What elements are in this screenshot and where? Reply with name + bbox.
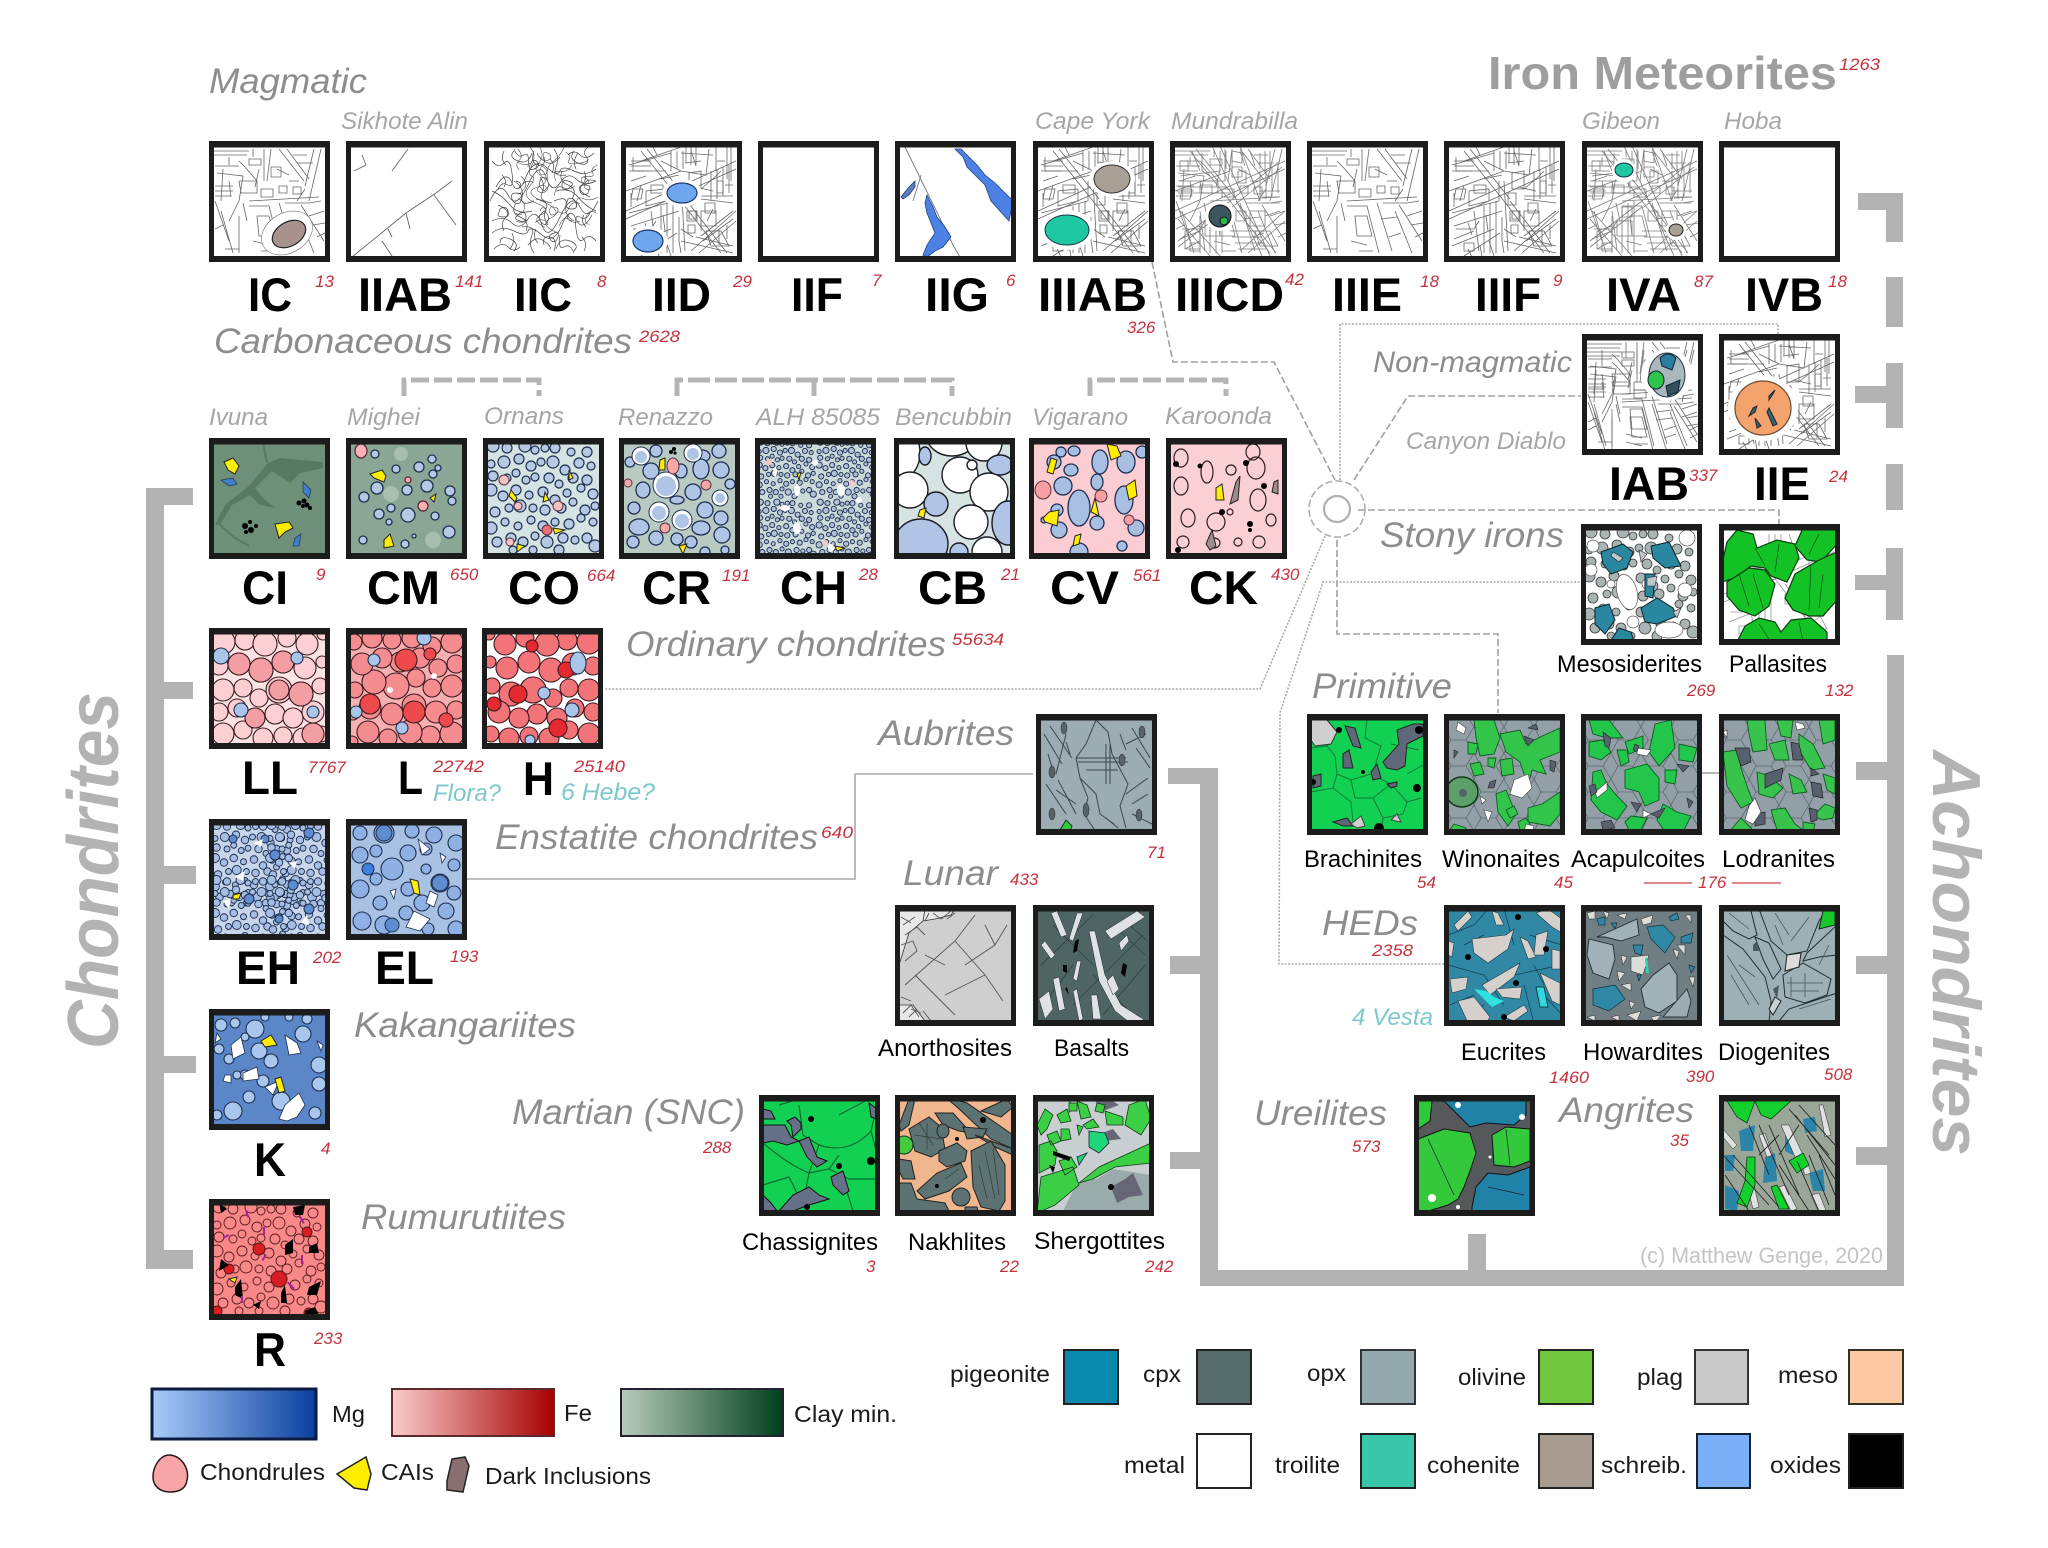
label: CO: CO (508, 561, 580, 614)
count: Pallasites: 132 (1825, 681, 1854, 700)
label: CB: CB (918, 561, 987, 614)
type name: Mighei: Mighei (347, 404, 421, 431)
legend: Mg gradient (152, 1389, 316, 1439)
mineral legend: troilite: troilite (1275, 1452, 1340, 1478)
panel: IIIF (1444, 141, 1565, 262)
panel: Ureilites (1414, 1095, 1535, 1216)
heading: Rumurutiites: Rumurutiites (361, 1198, 566, 1237)
heading: Stony irons: Stony irons (1380, 516, 1564, 555)
label: IIE: IIE (1754, 457, 1810, 510)
heading: Magmatic: Magmatic (209, 62, 368, 101)
count: IVB: 18 (1828, 272, 1847, 291)
panel: CH (755, 438, 876, 559)
count: HEDs: 2358 (1371, 941, 1414, 960)
type name: Cape York: Cape York (1035, 108, 1152, 135)
count: Martian: 288 (702, 1138, 732, 1157)
label: Basalts: Basalts (1054, 1035, 1129, 1062)
connector lines between groups (466, 262, 1781, 964)
mineral legend: oxides: oxides (1770, 1452, 1841, 1478)
count: carbonaceous: 2628 (638, 327, 681, 346)
type name: Hoba: Hoba (1724, 108, 1782, 135)
legend: clay gradient (621, 1389, 783, 1436)
count: CM: 650 (450, 565, 479, 584)
type name: Ivuna: Ivuna (209, 404, 268, 431)
panel: IIG (895, 141, 1016, 262)
label: IC: IC (248, 268, 292, 321)
label: IIG: IIG (925, 268, 989, 321)
count: Angrites: 35 (1670, 1131, 1689, 1150)
mineral legend: oxides (1770, 1434, 1903, 1488)
small dashed brackets: carbonaceous clans (404, 380, 1226, 396)
count: IIIF: 9 (1553, 271, 1563, 290)
label: IIAB: IIAB (358, 268, 452, 321)
panel: K (209, 1009, 330, 1130)
panel: H (482, 628, 603, 749)
label: Nakhlites: Nakhlites (908, 1229, 1006, 1256)
mineral legend: pigeonite (950, 1350, 1118, 1404)
label: IIICD: IIICD (1175, 268, 1284, 321)
count: EH: 202 (312, 948, 342, 967)
type name: Vigarano: Vigarano (1032, 404, 1128, 431)
count: K: 4 (321, 1139, 330, 1158)
legend label: Mg: Mg (332, 1401, 365, 1427)
mineral legend: cohenite (1427, 1434, 1593, 1488)
title: Iron Meteorites: Iron Meteorites (1488, 47, 1837, 99)
mineral legend: metal: metal (1124, 1452, 1185, 1478)
mineral legend: opx: opx (1307, 1360, 1347, 1386)
mineral legend: cpx (1143, 1350, 1251, 1404)
parent body: Flora: Flora? (433, 780, 502, 807)
type name: Canyon Diablo: Canyon Diablo (1406, 428, 1566, 455)
count: Brachinites: 54 (1417, 873, 1436, 892)
mineral legend: pigeonite: pigeonite (950, 1361, 1050, 1387)
count: Howardites: 390 (1686, 1067, 1715, 1086)
mineral legend: schreibersite: schreib. (1601, 1452, 1687, 1478)
label: Chassignites: Chassignites (742, 1229, 878, 1256)
count: Diogenites: 508 (1824, 1065, 1853, 1084)
legend: Fe gradient (392, 1389, 554, 1436)
count: L: 22742 (432, 757, 485, 776)
panel: Mesosiderites (1581, 524, 1702, 645)
label: IIC: IIC (514, 268, 572, 321)
label: Lodranites: Lodranites (1722, 846, 1835, 873)
count: enstatite: 640 (821, 823, 854, 842)
mineral legend: cohenite: cohenite (1427, 1452, 1520, 1478)
panel: Acapulcoites (1581, 714, 1702, 835)
panel: IIICD (1170, 141, 1291, 262)
heading: Kakangariites: Kakangariites (354, 1006, 576, 1045)
legend label: Dark Inclusions: Dark Inclusions (485, 1463, 651, 1489)
panel: Pallasites (1719, 524, 1840, 645)
panel: EH (209, 819, 330, 940)
count: CK: 430 (1271, 565, 1300, 584)
label: IIIF: IIIF (1475, 268, 1541, 321)
count: EL: 193 (450, 947, 479, 966)
mineral legend: troilite (1275, 1434, 1415, 1488)
heading: Martian (SNC): Martian (SNC) (512, 1093, 745, 1132)
panel: CK (1166, 438, 1287, 559)
heading: Aubrites: Aubrites (876, 714, 1014, 753)
heading: Carbonaceous chondrites: Carbonaceous chondrites (214, 322, 632, 361)
panel: CB (894, 438, 1015, 559)
mineral legend: plag (1637, 1350, 1748, 1404)
copyright note: (c) Matthew Genge, 2020 (1640, 1243, 1883, 1268)
panel: Lodranites (1719, 714, 1840, 835)
panel: EL (346, 819, 467, 940)
count: IIF: 7 (872, 271, 882, 290)
label: IID: IID (652, 268, 711, 321)
type name: ALH 85085: ALH 85085 (754, 404, 881, 431)
panel: IIAB (346, 141, 467, 262)
panel: L (346, 628, 467, 749)
count: Shergottites: 242 (1144, 1257, 1174, 1276)
panel: IC (209, 141, 330, 264)
count: IIICD: 42 (1285, 270, 1304, 289)
count: IAB: 337 (1689, 466, 1718, 485)
count: IIE: 24 (1828, 467, 1848, 486)
count: IVA: 87 (1694, 272, 1713, 291)
heading: Non-magmatic: Non-magmatic (1373, 346, 1572, 379)
mineral legend: olivine: olivine (1458, 1364, 1526, 1390)
label: EH: EH (236, 941, 300, 994)
count: Lunar: 433 (1010, 870, 1039, 889)
mineral legend: meso: meso (1778, 1362, 1838, 1388)
label: CH: CH (780, 561, 847, 614)
panel: CO (483, 438, 604, 559)
panel: Nakhlites (895, 1095, 1016, 1216)
heading: Ordinary chondrites: Ordinary chondrites (626, 625, 946, 664)
label: IVB: IVB (1745, 268, 1823, 321)
panel: Brachinites (1307, 714, 1428, 835)
mineral legend: meso (1778, 1350, 1903, 1404)
count: IID: 29 (732, 272, 752, 291)
heading: Ureilites: Ureilites (1254, 1094, 1387, 1133)
panel: Angrites (1719, 1095, 1840, 1216)
legend label: Chondrules: Chondrules (200, 1459, 325, 1485)
count: IIAB: 141 (455, 272, 483, 291)
panel: R (209, 1199, 330, 1320)
count: IIIE: 18 (1420, 272, 1439, 291)
count: CO: 664 (587, 566, 615, 585)
count: Ureilites: 573 (1352, 1137, 1381, 1156)
count: Aubrites: 71 (1147, 843, 1166, 862)
panel: CV (1029, 438, 1150, 561)
label: CK: CK (1189, 561, 1258, 614)
panel: CR (619, 438, 740, 559)
heading: Primitive: Primitive (1312, 667, 1452, 706)
legend label: Fe: Fe (564, 1400, 592, 1426)
rotated title: Achondrites: Achondrites (1918, 748, 1994, 1156)
count: acapulcoites and lodranites: 176 (1698, 873, 1727, 892)
label: CI: CI (242, 561, 288, 614)
count: CH: 28 (858, 565, 878, 584)
count: CI: 9 (316, 565, 326, 584)
panel: LL (209, 628, 330, 749)
count: Chassignites: 3 (866, 1257, 876, 1276)
panel: Chassignites (759, 1095, 880, 1216)
panel: IIC (484, 141, 605, 262)
type name: Bencubbin: Bencubbin (895, 404, 1012, 431)
count: R: 233 (313, 1329, 343, 1348)
panel: IID (621, 141, 742, 262)
type name: Karoonda: Karoonda (1165, 403, 1272, 430)
label: Pallasites: Pallasites (1729, 651, 1827, 678)
panel: IIIAB (1033, 141, 1154, 262)
panel: IIE (1719, 334, 1840, 455)
count: IIIAB: 326 (1127, 318, 1156, 337)
type name: Mundrabilla: Mundrabilla (1171, 108, 1298, 135)
label: LL: LL (242, 751, 298, 804)
label: IIIAB: IIIAB (1038, 268, 1147, 321)
panel: Basalts (1033, 905, 1154, 1026)
panel: IAB (1582, 334, 1703, 455)
label: IIF: IIF (791, 268, 843, 321)
label: H: H (523, 752, 554, 805)
label: Diogenites: Diogenites (1718, 1039, 1830, 1066)
mineral legend: plag: plag (1637, 1364, 1683, 1390)
label: Howardites: Howardites (1583, 1039, 1703, 1066)
mineral legend: cpx: cpx (1143, 1361, 1182, 1387)
heading: HEDs: HEDs (1322, 904, 1418, 943)
label: R: R (254, 1323, 286, 1376)
panel: IIIE (1307, 141, 1428, 262)
label: Acapulcoites: Acapulcoites (1571, 846, 1705, 873)
panel: Shergottites (1033, 1095, 1154, 1216)
type name: Ornans: Ornans (484, 403, 564, 430)
heading: Lunar: Lunar (903, 854, 999, 893)
heading: Angrites: Angrites (1557, 1091, 1694, 1130)
parent body: 6 Hebe: 6 Hebe? (561, 779, 656, 806)
label: CM: CM (367, 561, 440, 614)
count: Mesosiderites: 269 (1686, 681, 1716, 700)
label: IVA: IVA (1606, 268, 1681, 321)
panel: CM (346, 438, 467, 559)
count: Winonaites: 45 (1554, 873, 1573, 892)
label: CR: CR (642, 561, 711, 614)
label: Anorthosites: Anorthosites (878, 1035, 1012, 1062)
panel: Eucrites (1444, 905, 1565, 1026)
label: Brachinites: Brachinites (1304, 846, 1422, 873)
count: CV: 561 (1133, 566, 1161, 585)
label: Shergottites: Shergottites (1034, 1228, 1165, 1255)
panel: Howardites (1581, 905, 1702, 1026)
mineral legend: opx (1307, 1350, 1415, 1404)
panel: Diogenites (1719, 905, 1840, 1026)
legend label: CAIs: CAIs (381, 1459, 434, 1485)
parent body: 4 Vesta: 4 Vesta (1352, 1004, 1433, 1031)
heading: Enstatite chondrites: Enstatite chondrites (495, 818, 818, 857)
mineral legend: olivine (1458, 1350, 1593, 1404)
panel: IIF (758, 141, 879, 262)
panel: Aubrites (1036, 714, 1157, 835)
panel: CI (209, 438, 330, 559)
count: IIG: 6 (1006, 271, 1016, 290)
legend icon: chondrule (153, 1455, 188, 1492)
count: H: 25140 (573, 757, 626, 776)
count: LL: 7767 (308, 758, 346, 777)
label: L: L (398, 751, 423, 804)
type name: Sikhote Alin: Sikhote Alin (341, 108, 468, 135)
legend icon: CAI (337, 1457, 371, 1490)
panel: Winonaites (1444, 714, 1565, 835)
panel: IVB (1719, 141, 1840, 262)
type name: Gibeon: Gibeon (1582, 108, 1660, 135)
label: Mesosiderites: Mesosiderites (1557, 651, 1702, 678)
bracket: iron meteorites (1855, 193, 1903, 620)
label: CV: CV (1050, 561, 1120, 614)
mineral legend: schreibersite (1601, 1434, 1750, 1488)
label: Eucrites: Eucrites (1461, 1039, 1546, 1066)
count: Eucrites: 1460 (1549, 1068, 1590, 1087)
count: IIC: 8 (597, 272, 607, 291)
count: ordinary: 55634 (952, 630, 1004, 649)
bracket: chondrites (146, 488, 196, 1269)
type name: Renazzo: Renazzo (618, 404, 713, 431)
panel: IVA (1582, 141, 1703, 262)
panel: Anorthosites (895, 905, 1016, 1026)
legend icon: dark inclusion (447, 1457, 469, 1492)
rotated title: Chondrites: Chondrites (54, 692, 134, 1049)
count: CR: 191 (722, 566, 750, 585)
label: IIIE: IIIE (1332, 268, 1402, 321)
label: IAB: IAB (1609, 457, 1689, 510)
mineral legend: metal (1124, 1434, 1251, 1488)
count: Nakhlites: 22 (999, 1257, 1019, 1276)
count: IC: 13 (315, 272, 334, 291)
label: K: K (254, 1133, 286, 1186)
count: CB: 21 (1000, 565, 1020, 584)
bracket: achondrites (1168, 655, 1904, 1286)
label: Winonaites: Winonaites (1442, 846, 1560, 873)
label: EL: EL (375, 941, 434, 994)
count: iron meteorites total: 1263 (1839, 55, 1881, 74)
legend label: Clay min.: Clay min. (794, 1401, 897, 1427)
